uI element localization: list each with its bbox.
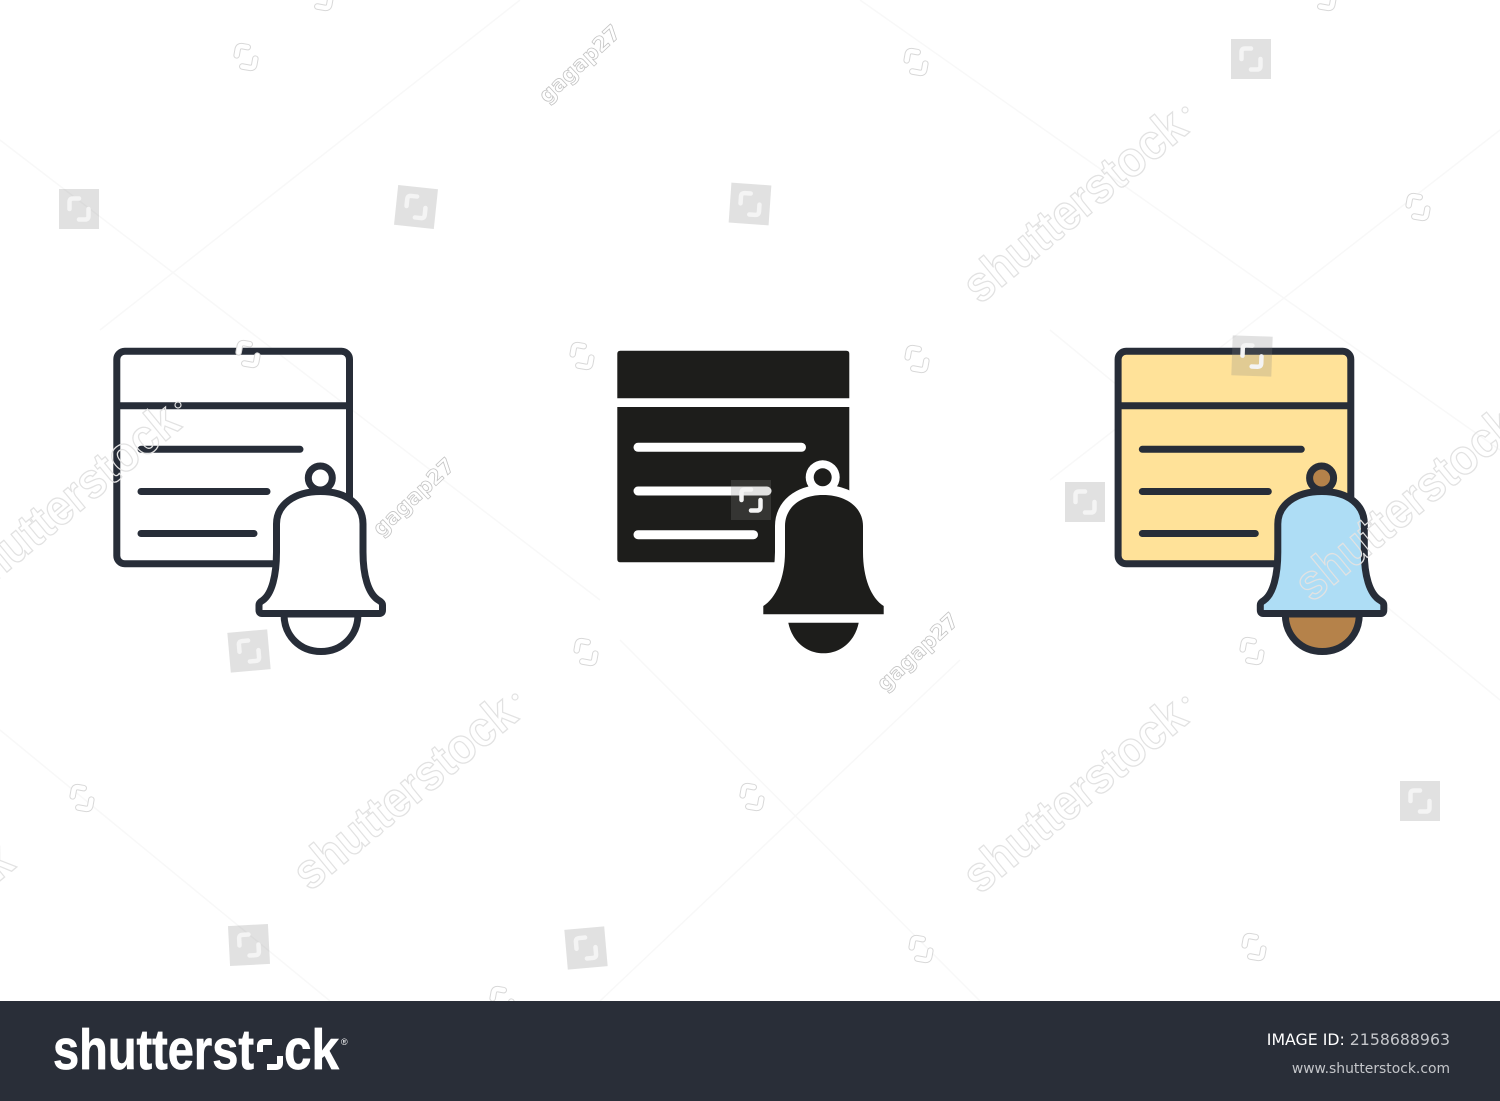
watermarks: gagap27 credits: gagap27 <box>534 20 625 108</box>
watermarks: shutterstock wordmarks: shutterstock <box>951 687 1197 903</box>
footer bar <box>0 1001 1500 1101</box>
icon: coloured calendar with bell <box>1118 351 1384 652</box>
coloured note card <box>1118 351 1351 564</box>
outline bell <box>259 466 382 652</box>
solid bell <box>755 460 895 653</box>
shutterstock logo: shutterst <box>53 1018 254 1082</box>
watermarks: grey boxed marks <box>59 39 1440 970</box>
shutterstock logo: ® <box>341 1037 348 1047</box>
watermarks: gagap27 credits: gagap27 <box>368 453 459 541</box>
outline note card <box>117 351 350 564</box>
image id: IMAGE ID: 2158688963 <box>1267 1030 1450 1049</box>
icon: outline calendar with bell <box>117 351 383 652</box>
shutterstock logo: ck <box>284 1018 339 1082</box>
icon: solid black calendar with bell <box>617 351 895 653</box>
coloured bell <box>1260 466 1384 652</box>
watermarks: gagap27 credits: gagap27 <box>872 608 963 696</box>
watermarks: shutterstock wordmarks: shutterstock <box>951 97 1197 313</box>
watermarks: shutterstock wordmarks: shutterstock <box>281 684 527 900</box>
website url: www.shutterstock.com <box>1292 1061 1450 1077</box>
solid note card <box>617 351 849 562</box>
watermarks: gagap27 credits <box>368 20 963 696</box>
